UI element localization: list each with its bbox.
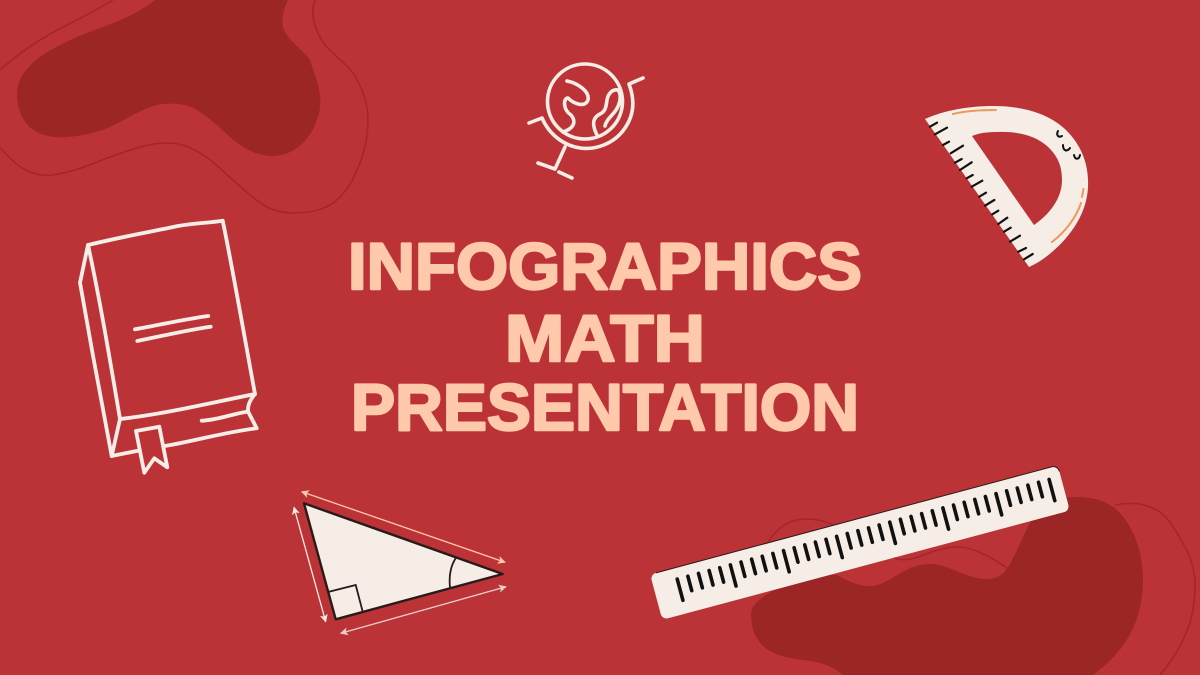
right angle mark: [329, 585, 363, 612]
book title lines: [135, 316, 211, 341]
ruler top edge: [656, 465, 1059, 579]
ruler short ticks: [688, 482, 1042, 591]
icon: ruler: [650, 465, 1070, 620]
protractor body: [925, 106, 1088, 267]
title line 2: MATH: [505, 301, 705, 375]
outline: bottom right: [768, 503, 1195, 675]
book pages: [112, 394, 257, 456]
title: [348, 229, 862, 444]
book spine: [80, 245, 120, 456]
globe continents: [563, 81, 620, 135]
icon: book: [80, 221, 257, 473]
protractor ticks: [930, 123, 1033, 259]
angle arc: [450, 558, 456, 588]
globe stand: [529, 78, 643, 178]
blob: top left: [17, 0, 320, 156]
ruler body: [650, 465, 1070, 620]
icon: protractor: [925, 106, 1088, 267]
icon: triangle: [294, 492, 506, 633]
outline: top left: [0, 0, 368, 213]
arrow: hypotenuse: [302, 492, 505, 562]
triangle body: [304, 503, 503, 619]
book cover: [88, 221, 255, 419]
ruler long ticks: [677, 479, 1055, 600]
book page line: [202, 412, 247, 421]
protractor small marks: [1057, 131, 1080, 159]
protractor orange accents: [953, 110, 1084, 242]
globe sphere: [548, 64, 622, 139]
icon: globe: [529, 64, 643, 178]
title line 1: INFOGRAPHICS: [348, 229, 862, 303]
title line 3: PRESENTATION: [351, 370, 859, 444]
bookmark: [136, 427, 167, 473]
arrow: left side: [294, 507, 326, 622]
blob: bottom right: [751, 497, 1143, 675]
arrow: bottom side: [341, 587, 506, 633]
